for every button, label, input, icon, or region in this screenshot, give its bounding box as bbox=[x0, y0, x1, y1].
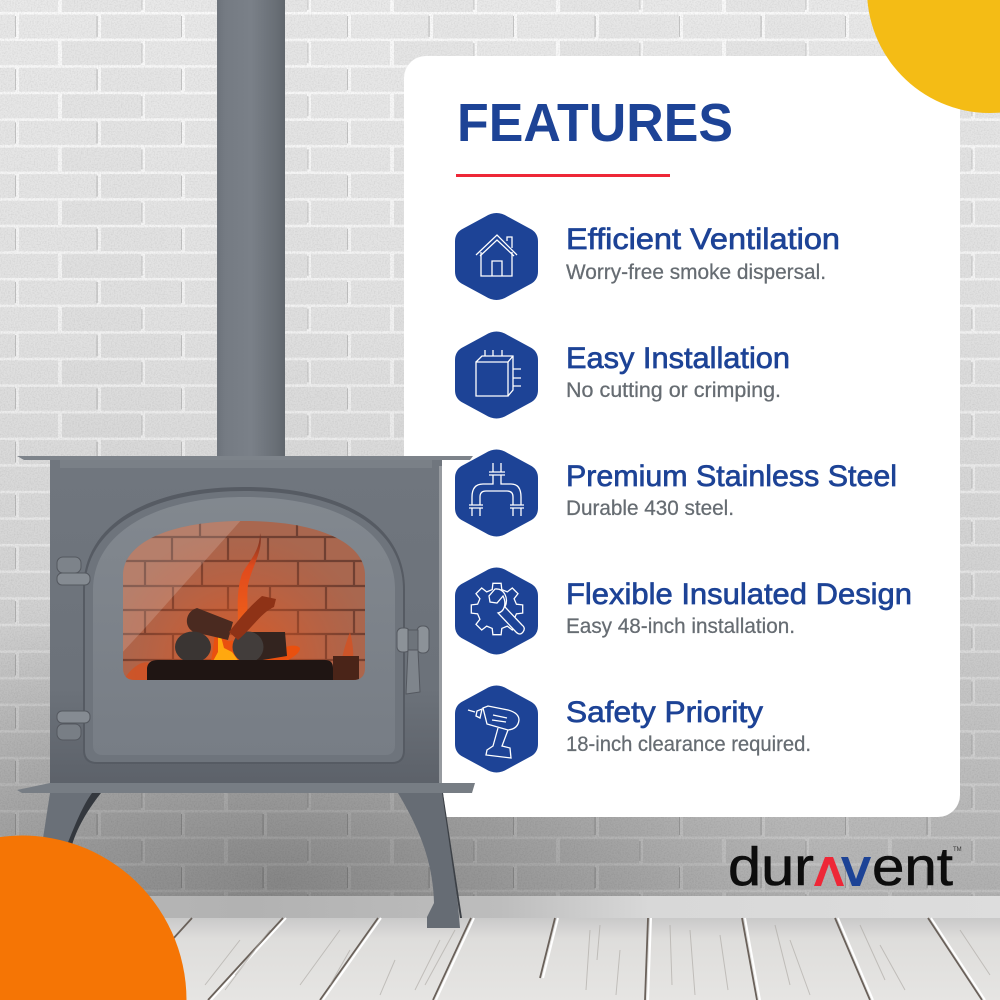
feature: efficient ventilation bbox=[455, 213, 840, 300]
left hinges bbox=[57, 557, 90, 740]
left leg bbox=[42, 793, 98, 845]
front log bbox=[147, 660, 333, 680]
description: Worry-free smoke dispersal. bbox=[566, 261, 826, 284]
feature: easy installation bbox=[455, 332, 790, 418]
tall flame bbox=[238, 533, 261, 628]
low flames bbox=[211, 637, 300, 660]
window bbox=[120, 518, 370, 683]
wood floor bbox=[0, 918, 1000, 1000]
title: Efficient Ventilation bbox=[566, 223, 840, 256]
body right highlight bbox=[439, 466, 442, 784]
icon: pipe bbox=[455, 450, 538, 536]
baseboard bbox=[0, 896, 1000, 918]
branch log bbox=[229, 596, 276, 640]
feature: safety priority bbox=[455, 686, 811, 772]
title: Easy Installation bbox=[566, 342, 790, 375]
back log bbox=[187, 608, 233, 640]
title: Premium Stainless Steel bbox=[566, 460, 897, 493]
logo: duravent: ent bbox=[872, 837, 953, 897]
top collar bbox=[60, 460, 432, 468]
red caret bbox=[814, 857, 844, 886]
right log end bbox=[232, 632, 264, 662]
title: Safety Priority bbox=[566, 696, 763, 729]
door rim bbox=[85, 491, 403, 762]
feature: flexible insulated design bbox=[455, 568, 912, 654]
logo: duravent bbox=[728, 837, 962, 897]
glass glare bbox=[120, 518, 243, 655]
description: Easy 48-inch installation. bbox=[566, 615, 795, 638]
icon: gear and wrench bbox=[455, 568, 538, 654]
right leg edge bbox=[442, 793, 462, 918]
side flames bbox=[124, 632, 353, 680]
door latch bbox=[397, 626, 429, 694]
left log bbox=[175, 632, 211, 662]
heading: FEATURES bbox=[457, 93, 733, 153]
icon: house bbox=[455, 213, 538, 300]
flue pipe bbox=[217, 0, 285, 456]
logo: duravent: TM bbox=[953, 847, 962, 853]
wood stove bbox=[17, 0, 475, 928]
bottom plate bbox=[17, 783, 475, 793]
description: 18-inch clearance required. bbox=[566, 733, 811, 756]
title: Flexible Insulated Design bbox=[566, 578, 912, 611]
blue v bbox=[841, 857, 871, 886]
feature: premium stainless steel bbox=[455, 450, 897, 536]
stove body bbox=[50, 458, 442, 786]
right leg bbox=[398, 793, 460, 928]
panel: features card bbox=[404, 56, 960, 817]
top plate bbox=[17, 456, 473, 460]
description: Durable 430 steel. bbox=[566, 497, 734, 520]
logo: duravent: dur bbox=[728, 837, 814, 897]
left leg edge bbox=[67, 793, 101, 845]
door rim shadow bbox=[83, 487, 405, 764]
far log bbox=[333, 656, 359, 680]
heading underline bbox=[456, 174, 670, 177]
yellow corner circle bbox=[867, 0, 1000, 113]
icon: insulated box bbox=[455, 332, 538, 418]
icon: drill bbox=[455, 686, 538, 772]
description: No cutting or crimping. bbox=[566, 379, 781, 402]
orange corner circle bbox=[0, 836, 186, 1000]
right log body bbox=[252, 632, 287, 660]
flame core bbox=[214, 638, 238, 660]
door face bbox=[93, 497, 395, 755]
